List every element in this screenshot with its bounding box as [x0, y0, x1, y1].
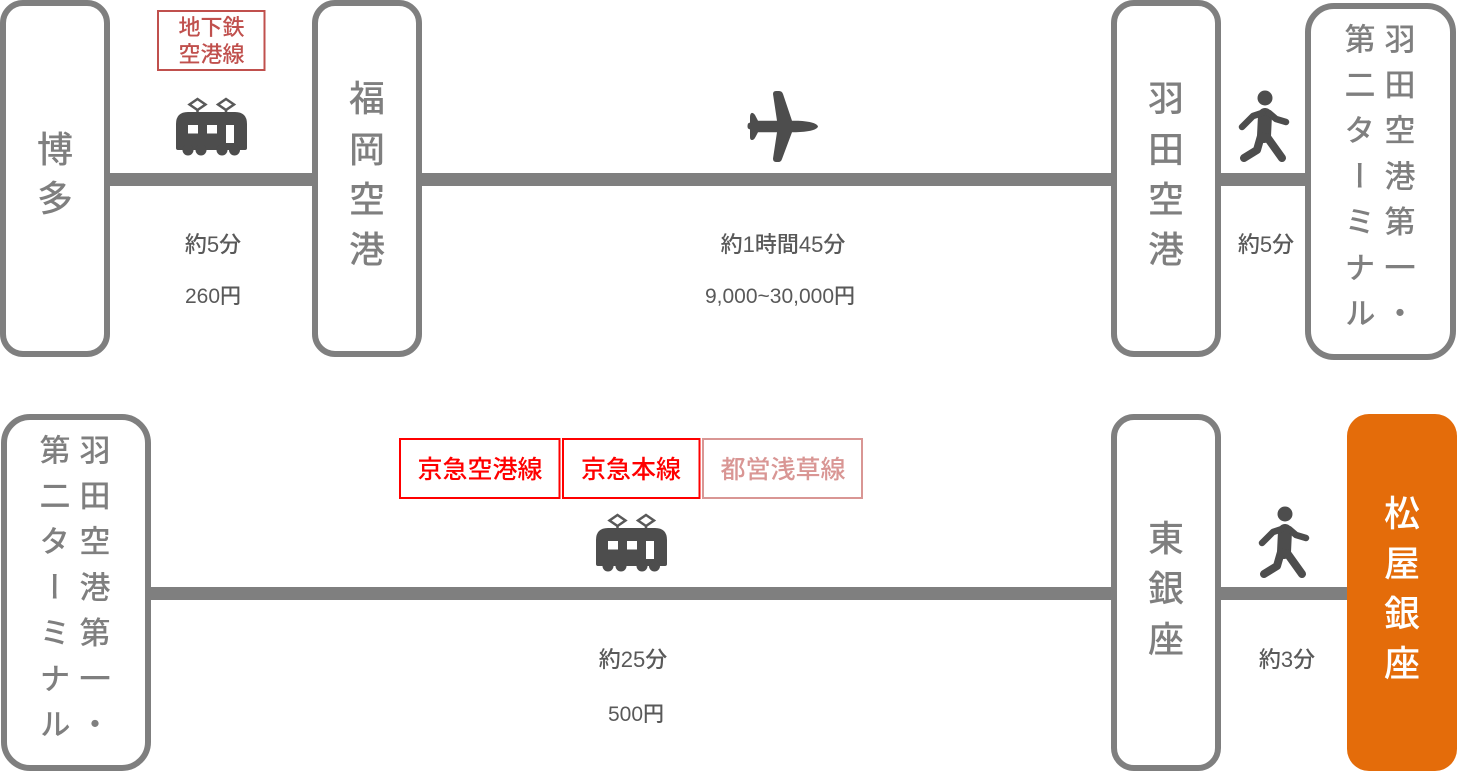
station: 福岡空港: 岡 — [349, 129, 385, 170]
station: 東銀座: 座 — [1148, 619, 1184, 660]
label: 約1時間45分 9,000~30,000円: 9,000~30,000円 — [705, 285, 855, 308]
station: 博多: 多 — [37, 178, 73, 219]
destination: 松屋銀座: 銀 — [1384, 593, 1420, 634]
label: 約1時間45分 9,000~30,000円 — [705, 232, 855, 308]
destination: 松屋銀座 — [1347, 414, 1457, 771]
line tag: 京急本線: 京急本線 — [581, 456, 681, 484]
icon: walker (top) — [1242, 90, 1286, 158]
line tag: 京急本線 — [563, 439, 700, 498]
label: 約5分 260円 — [185, 232, 241, 308]
line tag: 地下鉄空港線 — [158, 11, 264, 70]
station: 福岡空港: 空 — [349, 179, 385, 220]
station: 東銀座: 東 — [1148, 518, 1184, 559]
station: 羽田空港第一・第二ターミナル (bottom): 羽田空港第一・ — [74, 434, 110, 754]
destination: 松屋銀座: 松 — [1384, 493, 1420, 534]
line tag: 地下鉄空港線: 空港線 — [178, 42, 245, 67]
station: 羽田空港 — [1114, 3, 1218, 354]
icon: train (top) — [176, 99, 247, 156]
icon: train (bottom) — [596, 515, 667, 572]
station: 羽田空港第一・第二ターミナル (bottom): 第二ターミナル — [34, 434, 70, 754]
station: 福岡空港: 福 — [349, 78, 385, 119]
connector line: top row — [100, 173, 1315, 186]
station: 羽田空港: 田 — [1148, 129, 1184, 170]
station: 羽田空港: 空 — [1148, 179, 1184, 220]
station: 羽田空港: 港 — [1148, 229, 1184, 270]
label: 約5分 walk: 約5分 — [1238, 232, 1294, 257]
label: 約5分 260円: 約5分 — [185, 232, 241, 257]
station: 福岡空港: 港 — [349, 229, 385, 270]
line tag: 都営浅草線 — [703, 439, 862, 498]
station: 羽田空港第一・第二ターミナル (top): 第二ターミナル — [1340, 23, 1375, 343]
station: 福岡空港 — [315, 3, 419, 354]
station: 羽田空港: 羽 — [1148, 78, 1184, 119]
icon: walker (bottom) — [1262, 506, 1306, 574]
label: 約25分 500円: 約25分 — [599, 647, 667, 672]
station: 羽田空港第一・第二ターミナル (top) — [1308, 6, 1453, 357]
station: 博多: 博 — [37, 129, 73, 170]
station: 博多 — [3, 3, 107, 354]
station: 羽田空港第一・第二ターミナル (bottom) — [4, 417, 148, 768]
label: 約3分 walk: 約3分 — [1259, 647, 1315, 672]
destination: 松屋銀座: 屋 — [1384, 543, 1420, 584]
label: 約1時間45分 9,000~30,000円: 約1時間45分 — [721, 232, 845, 257]
station: 東銀座: 銀 — [1148, 568, 1184, 609]
line tag: 都営浅草線: 都営浅草線 — [720, 456, 846, 484]
label: 約25分 500円 — [599, 647, 667, 726]
line tag: 京急空港線: 京急空港線 — [417, 456, 543, 484]
connector line: bottom row — [140, 587, 1355, 600]
line tag: 地下鉄空港線: 地下鉄 — [178, 15, 245, 40]
station: 東銀座 — [1114, 417, 1218, 768]
destination: 松屋銀座: 座 — [1384, 643, 1420, 684]
line tag: 京急空港線 — [400, 439, 560, 498]
station: 羽田空港第一・第二ターミナル (top): 羽田空港第一・ — [1380, 23, 1415, 343]
icon: airplane — [748, 91, 818, 162]
label: 約5分 260円: 260円 — [185, 285, 241, 308]
label: 約25分 500円: 500円 — [608, 703, 664, 726]
